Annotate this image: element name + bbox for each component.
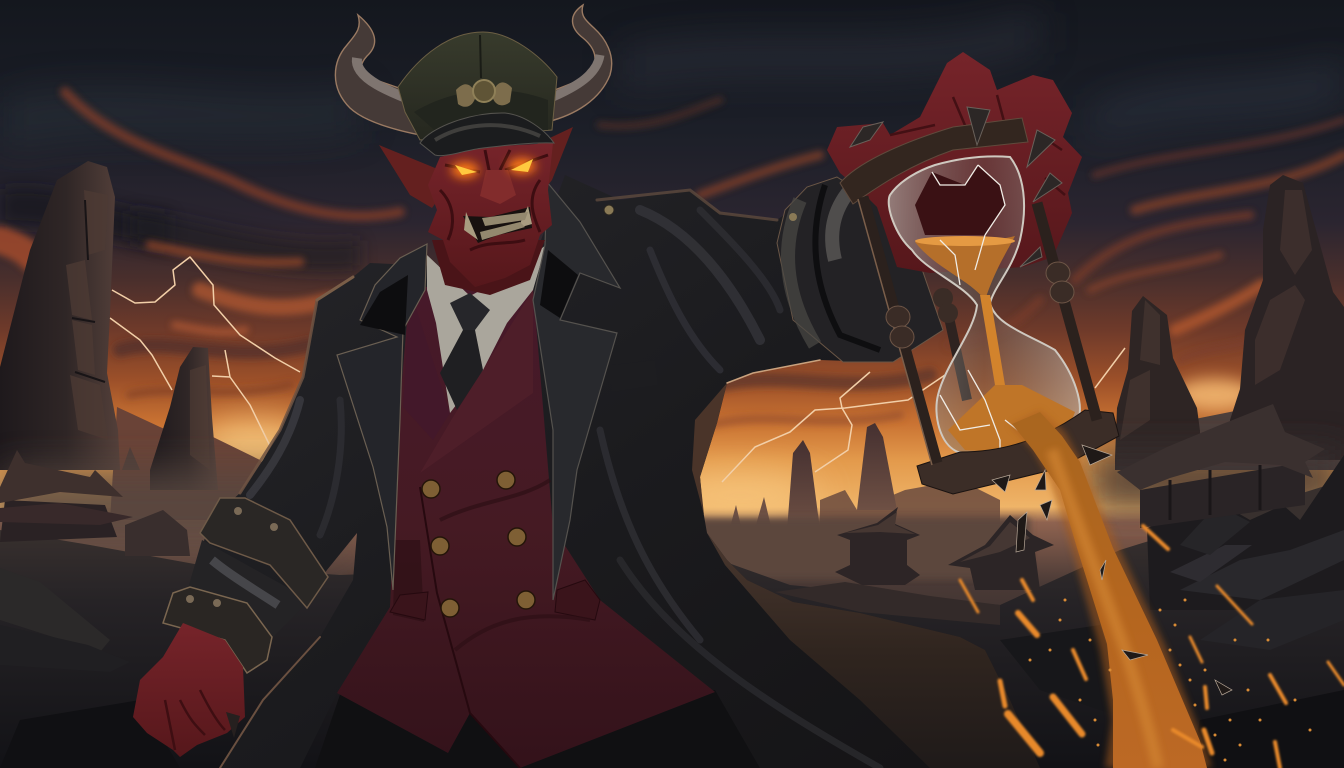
horizon mist	[0, 450, 1344, 578]
rim-lit coat tail	[707, 533, 1040, 768]
storm clouds	[0, 10, 1344, 272]
shiny forearm plate	[187, 540, 310, 640]
coat belt loop	[612, 360, 658, 392]
brow and cheek shadows	[440, 150, 548, 250]
pagoda: centre	[835, 507, 920, 585]
nose	[480, 170, 516, 204]
necktie	[440, 293, 490, 410]
face	[428, 143, 553, 287]
glass bulbs	[889, 156, 1080, 453]
spire: far left	[0, 161, 120, 470]
left forearm armour	[163, 498, 328, 673]
waistcoat buttons	[422, 471, 535, 617]
snarling mouth	[463, 206, 532, 243]
waistcoat	[337, 287, 715, 768]
glowing cloud streaks	[0, 92, 1344, 345]
trousers	[315, 680, 765, 768]
dark banding within the sunset	[120, 335, 1260, 425]
right sleeve cuff	[777, 177, 943, 362]
pagoda: far left	[0, 450, 133, 542]
right post	[1037, 203, 1097, 420]
rock slabs: centre	[775, 582, 1000, 625]
hourglass bottom plate	[917, 410, 1119, 494]
rear post	[933, 288, 967, 400]
broken plate shards	[992, 445, 1232, 695]
spires: centre distant	[787, 440, 820, 530]
hourglass top plate	[840, 118, 1028, 204]
officer cap	[398, 32, 557, 156]
spire: right large	[1230, 175, 1344, 460]
clawed hand	[827, 52, 1082, 273]
palm seen through broken glass	[915, 165, 1005, 235]
spire: right second	[1115, 296, 1200, 470]
distant mountains	[110, 400, 1344, 560]
neck	[432, 240, 545, 295]
hourglass and gripping hand	[827, 52, 1232, 768]
glass cracks	[932, 165, 1030, 455]
cap badge	[456, 80, 512, 107]
upper sand	[915, 236, 1015, 300]
sand spray particles	[1028, 598, 1312, 762]
pagoda: far right	[1117, 404, 1325, 528]
lower cuff	[163, 587, 272, 673]
pouring sand stream	[1010, 410, 1212, 768]
shirt collar	[427, 245, 546, 413]
upper bracer	[200, 498, 328, 608]
eyes	[451, 158, 536, 178]
ears	[379, 145, 445, 208]
rock slabs: right	[1147, 455, 1344, 610]
demon figure	[133, 175, 1040, 768]
horn right	[527, 5, 612, 122]
left hand	[133, 623, 245, 757]
left post	[858, 197, 937, 465]
claws	[850, 107, 1062, 267]
epaulette button	[604, 205, 614, 215]
overcoat body and sleeves	[190, 175, 1040, 768]
flying embers	[960, 526, 1344, 768]
coat lapel left	[337, 244, 427, 590]
waistcoat lapels and front edge	[390, 290, 600, 768]
coat lapel right	[533, 182, 620, 600]
horn left	[335, 15, 440, 135]
ground and rocks	[0, 455, 1344, 768]
spire: left middle	[150, 347, 218, 490]
falling sand in neck	[980, 295, 1005, 385]
demon head	[335, 5, 612, 295]
cap visor	[420, 113, 554, 156]
rock beside left pagoda	[125, 510, 190, 556]
rock slabs: left	[0, 568, 110, 652]
glowing horizon patches	[195, 379, 1255, 517]
coat folds and highlights	[220, 190, 880, 768]
distant rock spires	[0, 161, 1344, 535]
lightning bolts	[110, 257, 1125, 482]
pagoda: centre right	[948, 515, 1054, 590]
sand pile	[948, 385, 1075, 452]
